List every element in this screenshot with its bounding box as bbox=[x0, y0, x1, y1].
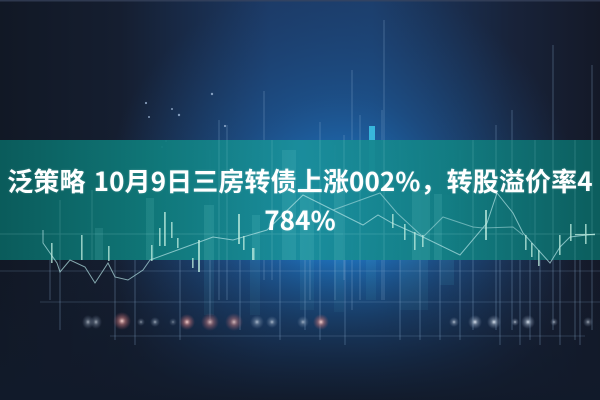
candlesticks bbox=[51, 210, 595, 272]
light streaks bbox=[50, 20, 592, 345]
glowing lights bbox=[82, 312, 593, 331]
dots bbox=[145, 93, 226, 148]
market lines bbox=[43, 193, 595, 283]
horizontal rules bbox=[0, 271, 600, 336]
accent bar bbox=[369, 126, 375, 186]
title: 泛策略 10月9日三房转债上涨002%，转股溢价率4 bbox=[7, 162, 593, 199]
band bbox=[0, 140, 600, 260]
title: 784% bbox=[264, 201, 336, 238]
title bbox=[7, 162, 593, 238]
city towers bbox=[204, 190, 454, 315]
